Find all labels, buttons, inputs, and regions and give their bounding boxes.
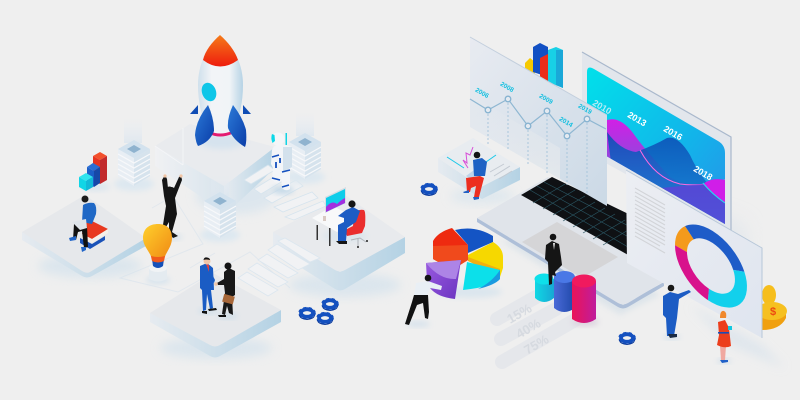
line series bbox=[470, 99, 606, 136]
ground outline lines bbox=[120, 196, 290, 292]
icon: small gear bbox=[421, 184, 437, 196]
panel: seated man platform bbox=[438, 138, 520, 204]
keyboard bbox=[521, 177, 645, 256]
icon: gold coins bbox=[757, 285, 787, 330]
pillar: left server bbox=[114, 118, 154, 191]
panel: monitor screen: 2018 bbox=[692, 164, 714, 182]
slice: purple bbox=[426, 260, 461, 299]
panel: laptop bbox=[477, 177, 690, 315]
person: man pointing at donut bbox=[663, 285, 691, 340]
panel: monitor screen: 2010 bbox=[591, 98, 613, 116]
icon: gear bottom bbox=[619, 333, 635, 345]
wave: blue bbox=[607, 132, 725, 230]
donut chart bbox=[681, 219, 741, 313]
person: man at desk on red chair bbox=[336, 200, 368, 248]
panel: document with donut bbox=[626, 170, 785, 368]
panel: monitor screen: 2016 bbox=[662, 124, 684, 142]
panel: bottom platform bbox=[150, 273, 281, 359]
icon: bar chart blocks bbox=[79, 152, 110, 191]
panel: line chart: 2006 bbox=[474, 87, 490, 100]
panel: monitor screen: 2013 bbox=[626, 110, 648, 128]
chart: back bar chart bbox=[525, 43, 563, 88]
panel: line chart: 2014 bbox=[558, 116, 574, 129]
stairs: upper bbox=[244, 165, 326, 220]
icon: blue gears group bbox=[299, 299, 338, 325]
person: man in blue suit handshake bbox=[198, 257, 218, 314]
icon: desk workstation bbox=[312, 187, 367, 246]
slice: blue bbox=[455, 228, 493, 253]
pillar: middle server bbox=[200, 174, 240, 242]
chart: pie bbox=[426, 228, 503, 299]
chart: cylinders bbox=[534, 271, 599, 326]
wave: purple bbox=[607, 119, 725, 224]
slice: cyan bbox=[463, 262, 500, 290]
icon: rocket bbox=[190, 35, 251, 147]
pill bars: percent: 75% bbox=[521, 331, 552, 357]
person: woman in red dress bbox=[717, 311, 732, 364]
slice: red bbox=[433, 228, 468, 270]
trackpad bbox=[522, 222, 618, 278]
pill bars: percent: 15% bbox=[504, 300, 535, 326]
icon: astronaut bbox=[271, 132, 294, 194]
panel: line chart: 2019 bbox=[577, 103, 593, 116]
slice: yellow bbox=[468, 242, 503, 277]
pill bars: percent bbox=[497, 297, 575, 362]
icon: gold coins: $ bbox=[770, 306, 776, 318]
panel: left platform bbox=[22, 195, 146, 278]
text lines bbox=[635, 188, 665, 253]
panel: central platform bbox=[155, 124, 276, 214]
pill bars: percent: 40% bbox=[513, 315, 544, 341]
person: man in black suit with briefcase bbox=[214, 262, 238, 319]
panel: right platform bbox=[273, 195, 405, 297]
panel: monitor screen bbox=[582, 52, 738, 234]
panel: line chart bbox=[470, 37, 607, 206]
panel: line chart: 2009 bbox=[538, 93, 554, 106]
person: man reading on books bbox=[69, 196, 108, 252]
person: man pushing pie slice bbox=[405, 275, 442, 327]
stairs: lower bbox=[238, 238, 320, 296]
panel: line chart: 2008 bbox=[499, 81, 515, 94]
icon: light bulb on pedestal bbox=[143, 224, 172, 284]
person: man with raised arms bbox=[162, 174, 183, 240]
person: man with laptop seated bbox=[463, 147, 487, 200]
person: man in black on cylinders bbox=[545, 234, 562, 285]
pillar: right server bbox=[285, 112, 325, 184]
